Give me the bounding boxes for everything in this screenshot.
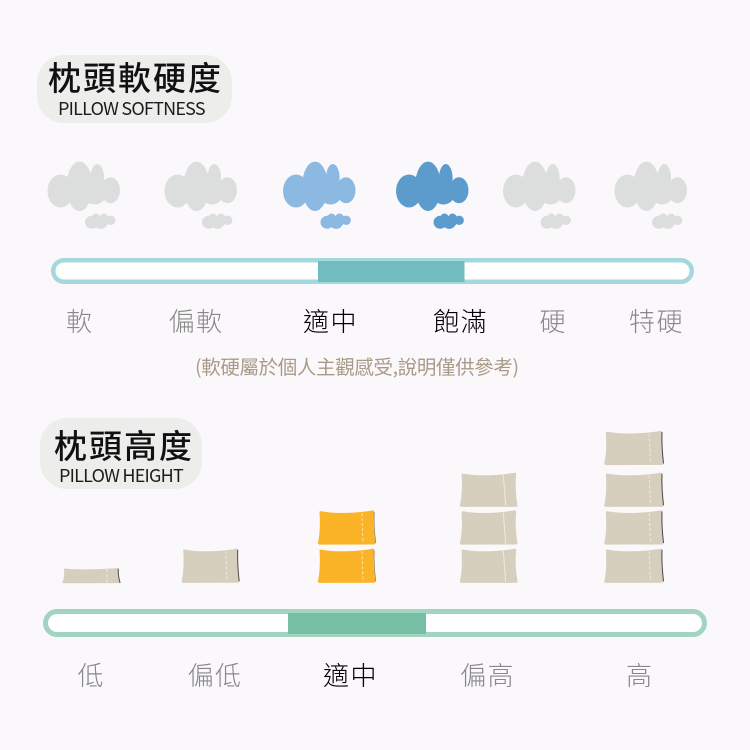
heading: pillow softness: 枕頭軟硬度	[48, 52, 223, 100]
icon: cloud moderate highlighted	[283, 162, 356, 229]
softness label: soft: 軟	[66, 302, 94, 338]
icon: cloud medium soft	[164, 162, 237, 229]
icon: cloud extra firm	[614, 162, 687, 229]
heading: pillow height: 枕頭高度	[54, 420, 194, 468]
height label: moderate: 適中	[323, 656, 378, 692]
heading badge: pillow softness	[37, 55, 232, 123]
icon: cloud full highlighted	[396, 162, 468, 229]
pillow stack: high	[604, 431, 664, 583]
softness scale bar	[53, 260, 692, 282]
softness label: firm: 硬	[540, 302, 567, 338]
subheading: pillow height: PILLOW HEIGHT	[59, 462, 183, 488]
icon: cloud soft	[48, 162, 120, 229]
height scale bar	[46, 612, 704, 634]
pillow stack: moderate highlighted	[318, 510, 376, 583]
height label: medium low: 偏低	[188, 656, 243, 692]
softness label: full: 飽滿	[433, 302, 488, 338]
pillow: medium low	[182, 549, 239, 583]
pillow: low	[62, 568, 120, 583]
heading badge: pillow height	[40, 418, 202, 489]
softness label: extra firm: 特硬	[629, 302, 684, 338]
height label: low: 低	[78, 656, 105, 692]
icon: cloud firm	[503, 162, 576, 229]
height label: medium high: 偏高	[460, 656, 515, 692]
subheading: pillow softness: PILLOW SOFTNESS	[58, 95, 205, 121]
softness disclaimer note: (軟硬屬於個人主觀感受,說明僅供參考)	[195, 350, 519, 380]
pillow stack: medium high	[460, 473, 517, 583]
softness label: moderate: 適中	[303, 302, 358, 338]
height label: high: 高	[626, 656, 654, 692]
softness label: medium soft: 偏軟	[168, 302, 224, 338]
